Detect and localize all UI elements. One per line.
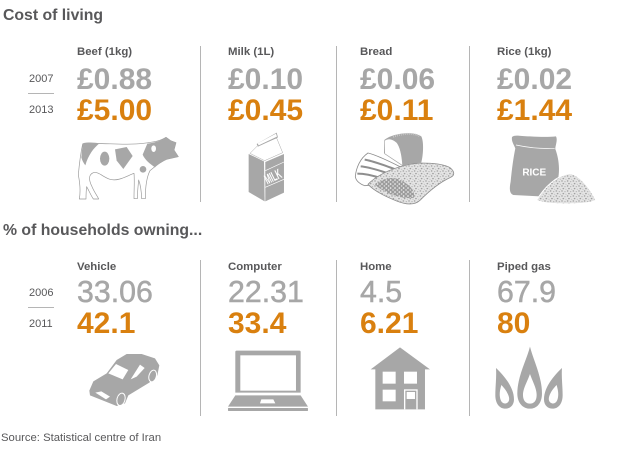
panel: rice: £1.44: [497, 94, 572, 127]
panel: home: Home: [360, 261, 392, 273]
icon: laptop: [228, 351, 308, 411]
icon: milk carton: MILK: [262, 167, 284, 188]
panel: beef: £5.00: [77, 94, 152, 127]
panel: piped gas: Piped gas: [497, 261, 551, 273]
year labels: 2007 and 2013: 2007: [29, 73, 53, 85]
panel: rice: [497, 46, 596, 204]
icon: cow: [78, 137, 178, 199]
source note: Source: Statistical centre of Iran: [1, 432, 161, 444]
panel: computer: 33.4: [228, 307, 287, 340]
panel: rice: Rice (1kg): [497, 46, 552, 58]
panel: home: 6.21: [360, 307, 418, 340]
year labels: 2007 and 2013: [28, 73, 54, 116]
icon: milk carton: [249, 133, 284, 201]
panel: piped gas: 67.9: [497, 276, 556, 309]
year labels: 2006 and 2011: 2011: [29, 318, 53, 330]
panel: vehicle: 33.06: [77, 276, 153, 309]
panel: beef: £0.88: [77, 63, 152, 96]
panel: vehicle: Vehicle: [77, 261, 116, 273]
icon: gas flames: [495, 347, 563, 409]
panel: computer: [228, 261, 308, 411]
panel: bread: Bread: [360, 46, 392, 58]
panel: computer: 22.31: [228, 276, 304, 309]
year labels: 2006 and 2011: 2006: [29, 287, 53, 299]
icon: bread: [355, 133, 454, 204]
panel: milk: £0.10: [228, 63, 303, 96]
icon: rice sack: [510, 136, 596, 204]
heading: households: % of households owning...: [3, 222, 202, 239]
panel: home: 4.5: [360, 276, 402, 309]
year labels: 2006 and 2011: [28, 287, 54, 330]
panel: bread: £0.11: [360, 94, 433, 127]
heading: cost of living: Cost of living: [3, 7, 103, 24]
panel: vehicle: [77, 261, 159, 406]
panel: piped gas: [495, 261, 563, 409]
year labels: 2007 and 2013: 2013: [29, 104, 53, 116]
panel: bread: £0.06: [360, 63, 435, 96]
panel: milk: Milk (1L): [228, 46, 274, 58]
icon: rice sack: RICE: [522, 167, 547, 178]
panel: beef: Beef (1kg): [77, 46, 132, 58]
icon: house: [371, 347, 430, 409]
panel: computer: Computer: [228, 261, 282, 273]
panel: piped gas: 80: [497, 307, 530, 340]
icon: car: [89, 354, 159, 406]
panel: beef: [77, 46, 178, 199]
panel: bread: [355, 46, 454, 204]
panel: home: [360, 261, 430, 409]
panel: milk: [228, 46, 303, 201]
panel: vehicle: 42.1: [77, 307, 135, 340]
panel: milk: £0.45: [228, 94, 303, 127]
panel: rice: £0.02: [497, 63, 572, 96]
